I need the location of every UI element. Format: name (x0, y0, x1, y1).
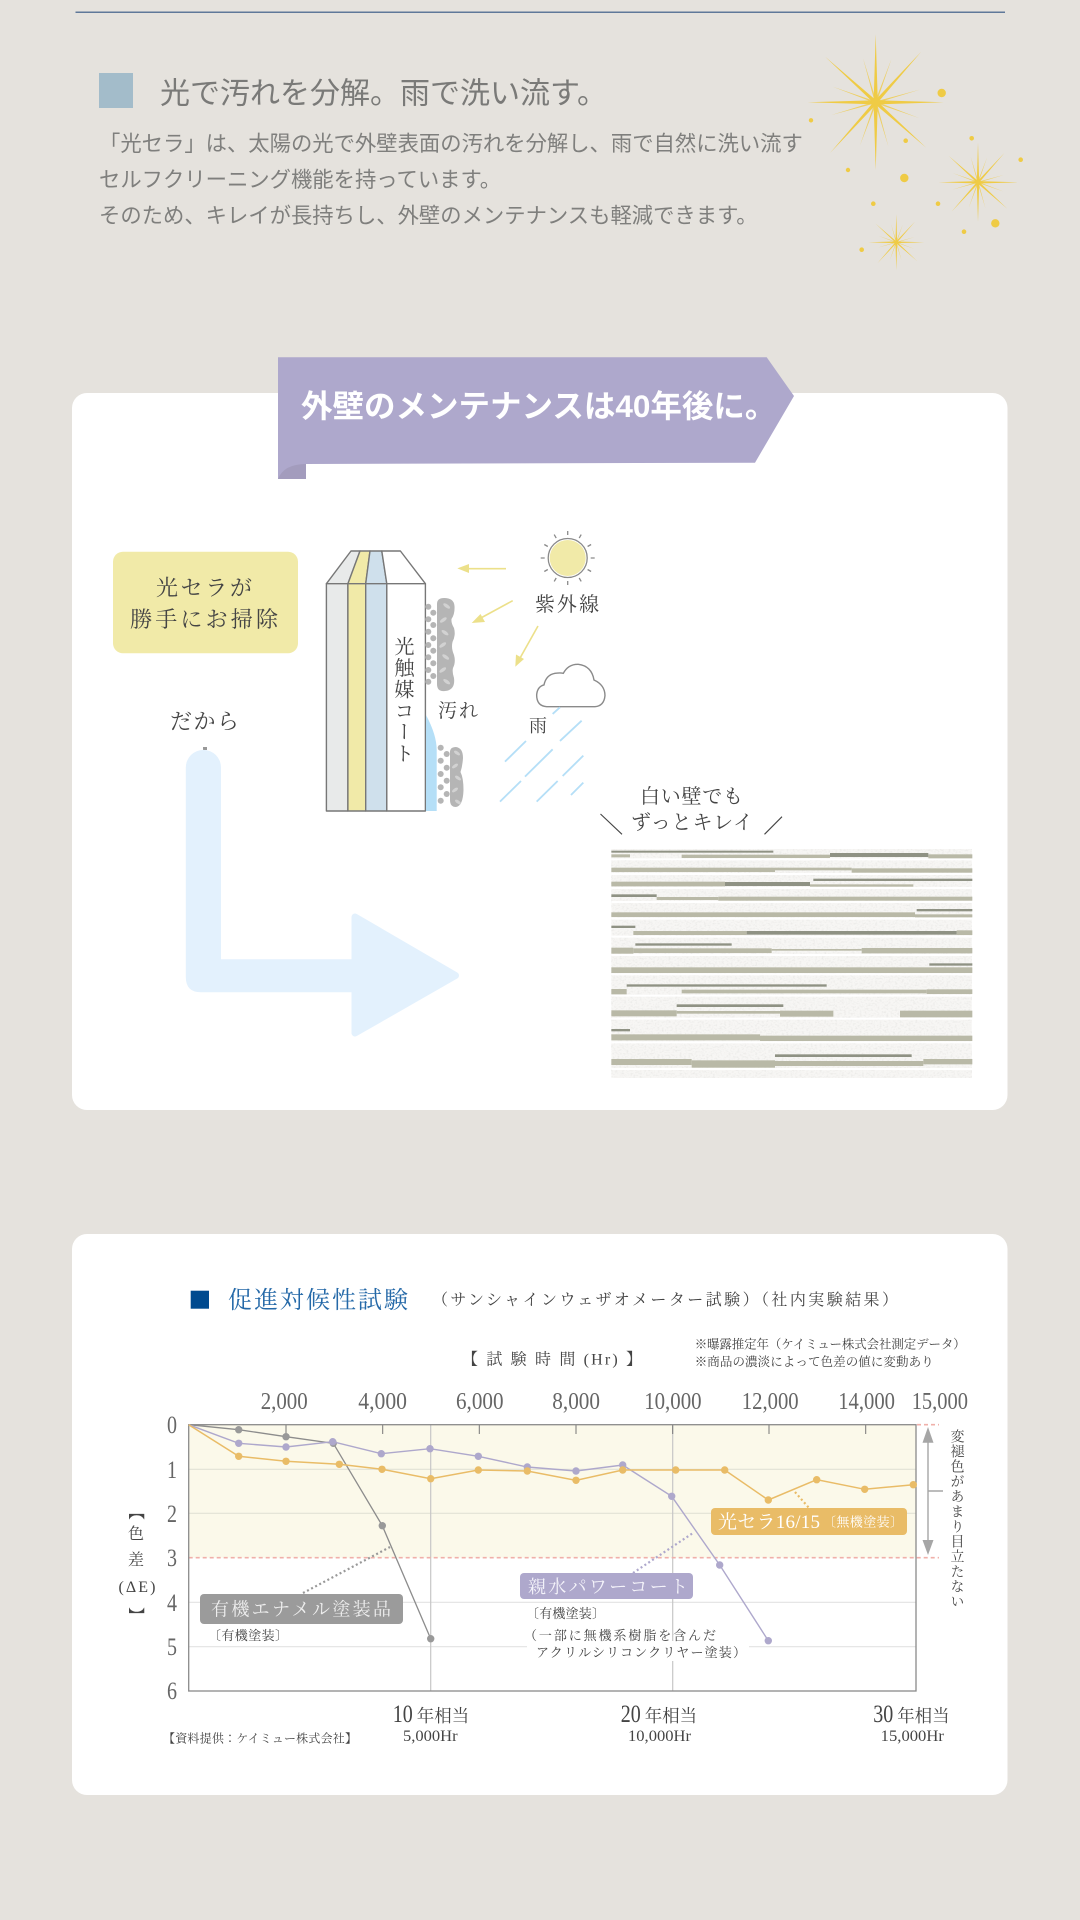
left axis labels: 2 (167, 1501, 177, 1528)
label: dirt: 汚れ (438, 700, 478, 722)
chart subtitle: （サンシャインウェザオメーター試験）（社内実験結果） (432, 1291, 898, 1309)
notes: ※商品の濃淡によって色差の値に変動あり (695, 1354, 934, 1369)
label: ultraviolet: 紫外線 (535, 593, 599, 616)
callout: organic enamel: 〔有機塗装〕 (208, 1628, 288, 1643)
arrows: UV rays (457, 564, 538, 667)
y axis title (118, 1504, 156, 1623)
y axis title: 色 (128, 1525, 144, 1543)
bottom axis: equivalent years: 10年相当 (393, 1701, 469, 1728)
dirt lower (438, 745, 464, 807)
chart: color difference over time (118, 1389, 968, 1746)
callout: hikari sera: 光セラ16/15 (718, 1511, 820, 1533)
top axis labels (261, 1389, 968, 1415)
top axis labels: 8,000 (552, 1389, 600, 1415)
top axis labels: 12,000 (742, 1389, 799, 1415)
range arrow (922, 1427, 943, 1555)
left axis labels: 6 (167, 1678, 177, 1705)
intro paragraph: そのため、キレイが長持ちし、外壁のメンテナンスも軽減できます。 (99, 204, 758, 228)
y axis title: 差 (128, 1551, 144, 1569)
photo: siding wall texture (611, 849, 972, 1078)
label: photocatalyst coat: 光触媒コート (391, 636, 414, 764)
bottom axis: equivalent years: 30年相当 (873, 1701, 950, 1728)
y axis title: (ΔE) (118, 1579, 156, 1596)
left axis labels (167, 1412, 177, 1705)
sparkles decoration (808, 34, 1023, 270)
left axis labels: 1 (167, 1457, 177, 1484)
dirt upper (425, 598, 455, 691)
intro paragraph (99, 132, 803, 228)
heading: 光で汚れを分解。雨で洗い流す。 (160, 78, 607, 110)
icon: cloud (537, 664, 605, 707)
bottom axis: equivalent years: 20年相当 (621, 1701, 697, 1728)
callout: hikari sera (711, 1508, 907, 1535)
callout: hydrophilic power coat: 親水パワーコート (528, 1577, 688, 1597)
series: hikari sera 16/15 (189, 1425, 917, 1504)
chart title: 促進対候性試験 (228, 1287, 408, 1314)
label: rain: 雨 (529, 716, 547, 736)
bottom axis: equivalent years: 10,000Hr (628, 1728, 692, 1745)
callout: self cleaning: 光セラが (156, 576, 252, 600)
top axis labels: 4,000 (358, 1389, 407, 1415)
icon: sun (541, 531, 595, 585)
panel: accelerated weathering test (72, 1234, 1008, 1795)
bottom axis: equivalent years (393, 1701, 950, 1745)
diagram: wall cross-section (326, 551, 425, 811)
callout: hydrophilic power coat: （一部に無機系樹脂を含んだ (524, 1628, 716, 1643)
top rule (76, 12, 1005, 13)
section marker square (191, 1291, 209, 1309)
ribbon banner (278, 357, 794, 479)
ribbon banner: 外壁のメンテナンスは40年後に。 (301, 388, 776, 424)
left axis labels: 5 (167, 1634, 177, 1661)
range note: 変褪色があまり目立たない (948, 1428, 964, 1609)
water film (426, 715, 437, 811)
series: hydrophilic power coat (189, 1425, 772, 1644)
top axis labels: 2,000 (261, 1389, 308, 1415)
callout: hydrophilic power coat: 〔有機塗装〕 (526, 1606, 605, 1621)
intro paragraph: セルフクリーニング機能を持っています。 (99, 168, 501, 192)
big arrow (186, 750, 456, 1033)
callout: organic enamel (200, 1594, 403, 1643)
callout: hydrophilic power coat (520, 1573, 749, 1661)
label: therefore: だから (170, 709, 239, 734)
left axis labels: 0 (167, 1412, 177, 1439)
caption: white wall stays clean (600, 785, 782, 834)
bottom axis: equivalent years: 15,000Hr (881, 1728, 945, 1745)
bottom axis: equivalent years: 5,000Hr (403, 1728, 458, 1745)
x axis title: 【 試 験 時 間 (Hr) 】 (462, 1350, 642, 1368)
notes: ※曝露推定年（ケイミュー株式会社測定データ） (695, 1336, 966, 1352)
y axis title: 【 (126, 1504, 144, 1520)
rain streaks (500, 707, 583, 802)
series: organic enamel (189, 1425, 434, 1642)
y axis title: 】 (126, 1607, 144, 1623)
panel: maintenance card (72, 357, 1008, 1110)
caption: white wall stays clean: 白い壁でも (640, 785, 743, 808)
callout: self cleaning: 勝手にお掃除 (130, 607, 279, 632)
callout: organic enamel: 有機エナメル塗装品 (211, 1600, 391, 1620)
heading marker square (99, 73, 133, 108)
marker above arrow (203, 747, 207, 750)
top axis labels: 14,000 (838, 1389, 895, 1415)
left axis labels: 4 (167, 1590, 177, 1617)
callout: hikari sera: 〔無機塗装〕 (823, 1514, 903, 1530)
notes (695, 1336, 966, 1369)
top axis labels: 15,000 (912, 1389, 968, 1415)
intro paragraph: 「光セラ」は、太陽の光で外壁表面の汚れを分解し、雨で自然に洗い流す (99, 132, 803, 156)
left axis labels: 3 (167, 1545, 177, 1572)
top axis labels: 6,000 (456, 1389, 504, 1415)
callout: hydrophilic power coat: アクリルシリコンクリヤー塗装） (536, 1645, 746, 1660)
source credit: 【資料提供：ケイミュー株式会社】 (163, 1730, 357, 1746)
callout: self cleaning (113, 552, 298, 653)
top axis labels: 10,000 (644, 1389, 702, 1415)
caption: white wall stays clean: ずっとキレイ (631, 811, 753, 834)
leader lines (303, 1492, 809, 1593)
